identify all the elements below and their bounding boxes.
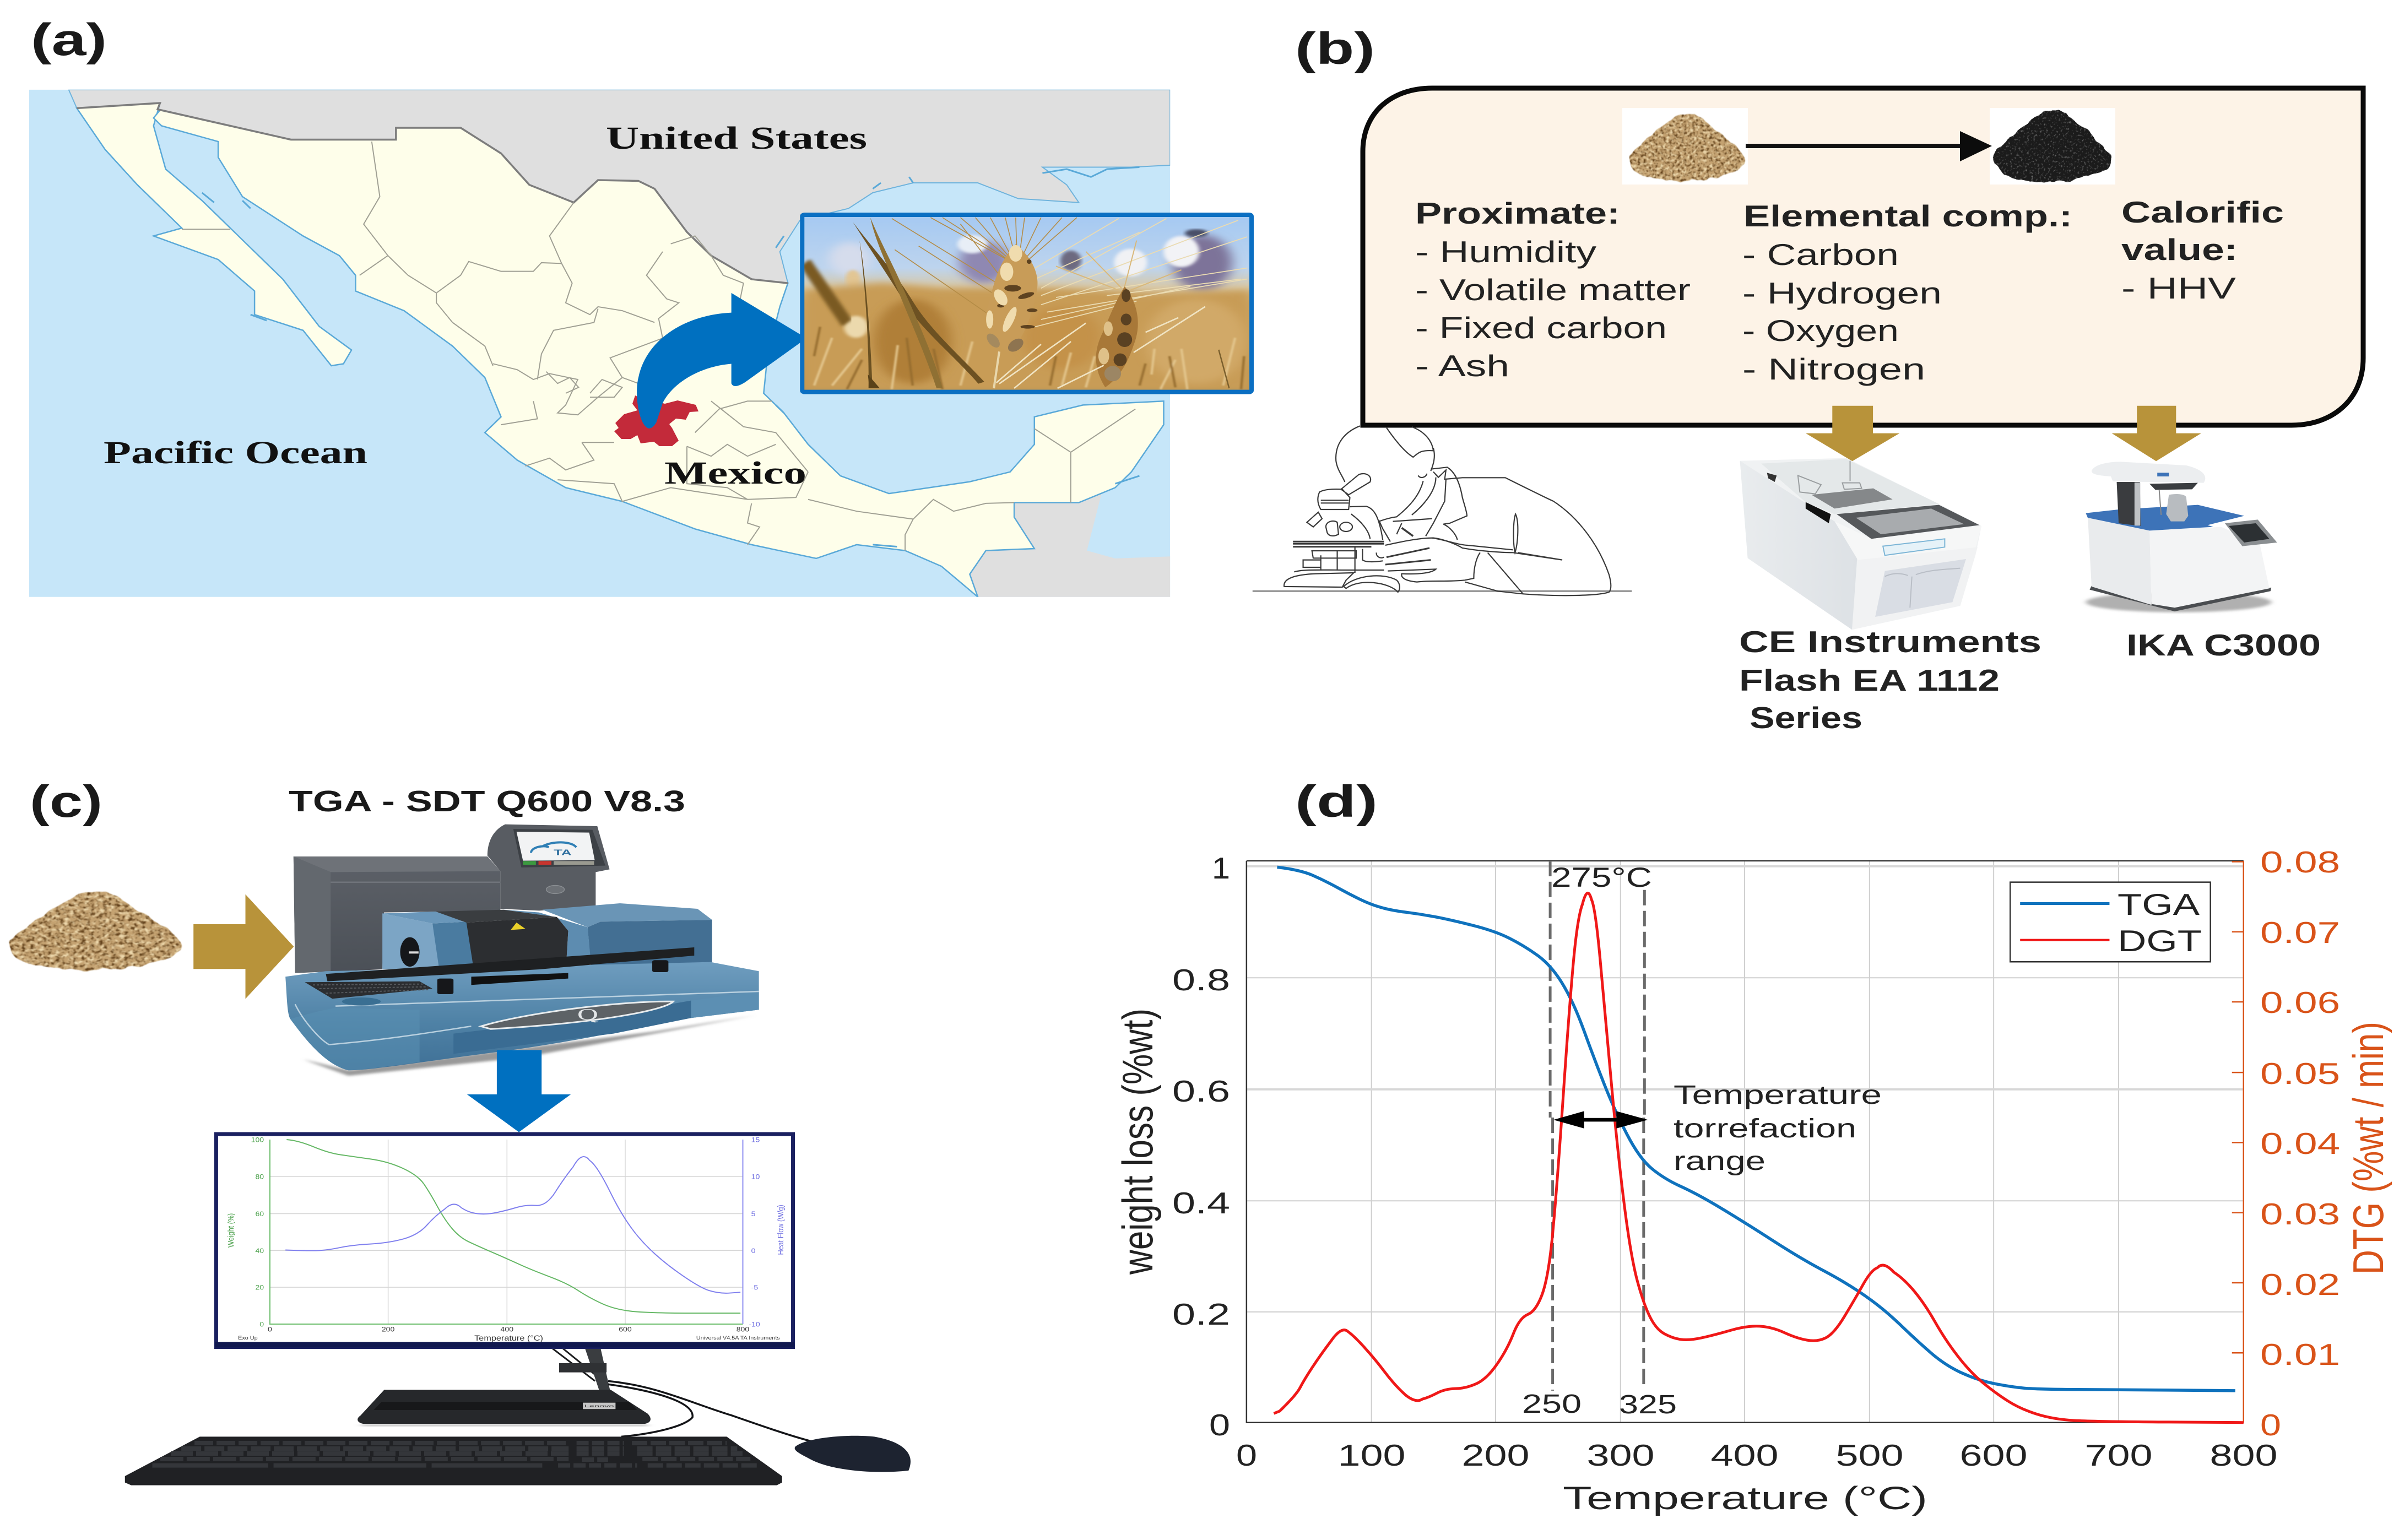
- border US Mexico: [77, 103, 788, 283]
- text block: elemental composition: - Carbon: [1742, 237, 1899, 272]
- legend labels: [2118, 887, 2202, 958]
- map label: Mexico: Mexico: [664, 455, 806, 491]
- computer monitor with thermogram: Temperature (°C): [474, 1334, 543, 1342]
- TGA curve: [1277, 867, 2235, 1391]
- label 325: 325: [1619, 1390, 1677, 1419]
- computer monitor with thermogram: 5: [751, 1210, 756, 1218]
- bottom axis ticks: 600: [1960, 1438, 2027, 1472]
- annotation: torrefaction range: range: [1674, 1147, 1766, 1176]
- left axis ticks: 0.2: [1172, 1297, 1230, 1331]
- illustration: IKA calorimeter: [2086, 462, 2277, 612]
- legend: [2010, 882, 2211, 962]
- label: CE Instruments: Series: [1750, 701, 1862, 735]
- panel: (c) TGA setup: [9, 777, 911, 1486]
- computer monitor with thermogram: 800: [737, 1326, 749, 1333]
- bottom axis ticks: 500: [1835, 1438, 1904, 1472]
- computer monitor with thermogram: 0: [751, 1247, 756, 1255]
- gold arrow to elemental analyzer: [1806, 406, 1899, 461]
- legend labels: TGA: [2118, 887, 2200, 921]
- computer monitor with thermogram: Exo Up: [238, 1336, 258, 1341]
- label: IKA C3000: IKA C3000: [2126, 628, 2321, 662]
- blue arrow to computer: [467, 1050, 571, 1132]
- panel: (b) characterization: [1253, 24, 2363, 735]
- bottom axis ticks: 400: [1711, 1438, 1778, 1472]
- label (c): (c): [30, 777, 102, 827]
- computer monitor with thermogram: 15: [751, 1136, 760, 1143]
- computer monitor with thermogram: 400: [501, 1326, 513, 1333]
- computer monitor with thermogram: Universal V4.5A TA Instruments: [696, 1336, 780, 1341]
- text block: elemental composition: Elemental comp.:: [1743, 199, 2072, 233]
- computer monitor with thermogram: 0: [259, 1321, 264, 1328]
- text block: proximate: [1415, 196, 1691, 383]
- text block: elemental composition: - Nitrogen: [1742, 352, 1925, 386]
- bottom axis ticks: 200: [1462, 1438, 1529, 1472]
- illustration: CE elemental analyzer: [1740, 458, 1981, 630]
- computer monitor with thermogram: 80: [255, 1173, 264, 1180]
- computer monitor with thermogram: -10: [749, 1321, 760, 1328]
- right axis ticks: 0.03: [2260, 1197, 2340, 1231]
- DTG curve: [1274, 893, 2244, 1423]
- left axis ticks: 0.4: [1172, 1186, 1230, 1220]
- monitor stand and cables: [358, 1347, 811, 1441]
- bottom axis ticks: 800: [2210, 1438, 2277, 1472]
- right axis ticks: 0.04: [2260, 1126, 2340, 1161]
- right axis title: DTG (%wt / min): [2344, 1022, 2392, 1275]
- text block: calorific value: - HHV: [2121, 271, 2236, 305]
- line chart: [1247, 861, 2244, 1423]
- left axis ticks: [1172, 851, 1230, 1442]
- text block: proximate: - Humidity: [1415, 235, 1597, 269]
- computer monitor with thermogram: 10: [751, 1173, 760, 1180]
- title TGA: TGA - SDT Q600 V8.3: [289, 785, 685, 818]
- arrow raw to torrefied: [1746, 131, 1992, 161]
- biomass pile: [9, 892, 181, 970]
- right axis ticks: 0.07: [2260, 915, 2340, 950]
- annotation: torrefaction range: [1674, 1081, 1882, 1176]
- left axis ticks: 0.6: [1172, 1074, 1230, 1108]
- label: CE Instruments: Flash EA 1112: [1739, 663, 2000, 697]
- computer monitor with thermogram: 0: [268, 1326, 272, 1333]
- left axis title: weight loss (%wt): [1113, 1008, 1162, 1275]
- text block: proximate: - Fixed carbon: [1415, 311, 1667, 345]
- x axis title: Temperature (°C): [1563, 1481, 1927, 1516]
- label: CE Instruments: [1739, 625, 2041, 735]
- computer monitor with thermogram: 600: [619, 1326, 632, 1333]
- left axis ticks: 0.8: [1172, 963, 1230, 997]
- illustration: TGA instrument: [285, 825, 759, 1076]
- computer monitor with thermogram: 100: [251, 1136, 264, 1143]
- bottom axis ticks: 0: [1236, 1438, 1257, 1472]
- illustration: scientist at microscope: [1253, 426, 1632, 595]
- gold arrow to TGA: [193, 894, 294, 999]
- torrefaction range arrow: [1553, 1111, 1648, 1129]
- text block: calorific value: Calorific: [2121, 195, 2284, 229]
- label (b): (b): [1295, 24, 1375, 74]
- text block: proximate: Proximate:: [1415, 196, 1620, 230]
- computer monitor with thermogram: -5: [751, 1284, 758, 1291]
- illustration: TGA instrument: TA: [554, 848, 572, 857]
- right axis ticks: 0: [2260, 1408, 2281, 1442]
- torrefied biomass pile: [1990, 108, 2115, 185]
- right axis ticks: [2260, 845, 2340, 1442]
- mouse: [795, 1436, 911, 1472]
- computer monitor with thermogram: 200: [382, 1326, 394, 1333]
- right axis ticks: 0.05: [2260, 1056, 2340, 1091]
- right axis ticks: 0.02: [2260, 1267, 2340, 1302]
- map of Mexico: [29, 90, 1170, 597]
- text block: calorific value: value:: [2121, 232, 2238, 267]
- computer monitor with thermogram: [215, 1134, 794, 1347]
- text block: elemental composition: - Hydrogen: [1742, 276, 1942, 310]
- blue curved arrow: [637, 293, 806, 429]
- map label: Pacific Ocean: Pacific Ocean: [104, 435, 367, 470]
- gold arrow to calorimeter: [2112, 406, 2201, 461]
- wheat photo: [802, 215, 1252, 392]
- right axis ticks: 0.08: [2260, 845, 2340, 879]
- computer monitor with thermogram: Weight (%): [226, 1213, 235, 1248]
- panel: (d) TGA and DTG chart: [1113, 777, 2392, 1516]
- bottom axis ticks: 300: [1586, 1438, 1655, 1472]
- annotation: torrefaction range: Temperature: [1674, 1081, 1882, 1110]
- raw biomass pile: [1622, 108, 1748, 185]
- illustration: TGA instrument: Q: [577, 1006, 598, 1024]
- left axis ticks: 0: [1209, 1408, 1230, 1442]
- label (a): (a): [31, 15, 107, 65]
- bottom axis ticks: [1236, 1438, 2277, 1472]
- computer monitor with thermogram: Heat Flow (W/g): [776, 1205, 785, 1255]
- label (d): (d): [1295, 777, 1378, 827]
- map label: United States: United States: [606, 120, 867, 156]
- legend labels: DGT: [2118, 924, 2202, 958]
- keyboard: [125, 1436, 782, 1486]
- rounded analysis box: [1363, 88, 2363, 425]
- text block: calorific value: [2121, 195, 2284, 305]
- bottom axis ticks: 700: [2084, 1438, 2153, 1472]
- text block: proximate: - Volatile matter: [1415, 273, 1691, 307]
- monitor stand and cables: Lenovo: [584, 1404, 614, 1408]
- highlighted state: [614, 395, 698, 446]
- computer monitor with thermogram: 40: [255, 1247, 264, 1255]
- annotation: torrefaction range: torrefaction: [1674, 1114, 1856, 1143]
- label: CE Instruments: CE Instruments: [1739, 625, 2041, 659]
- bottom axis ticks: 100: [1337, 1438, 1406, 1472]
- left axis ticks: 1: [1212, 851, 1230, 885]
- text block: elemental composition: - Oxygen: [1742, 313, 1899, 348]
- computer monitor with thermogram: 60: [255, 1210, 264, 1218]
- panel: (a) location map: [29, 15, 1252, 597]
- label 250: 250: [1522, 1390, 1582, 1419]
- right axis ticks: 0.01: [2260, 1337, 2340, 1371]
- right axis ticks: 0.06: [2260, 985, 2340, 1020]
- peak label: 275°C: [1551, 862, 1652, 893]
- computer monitor with thermogram: 20: [255, 1284, 264, 1291]
- text block: elemental composition: [1742, 199, 2072, 386]
- text block: proximate: - Ash: [1415, 349, 1509, 383]
